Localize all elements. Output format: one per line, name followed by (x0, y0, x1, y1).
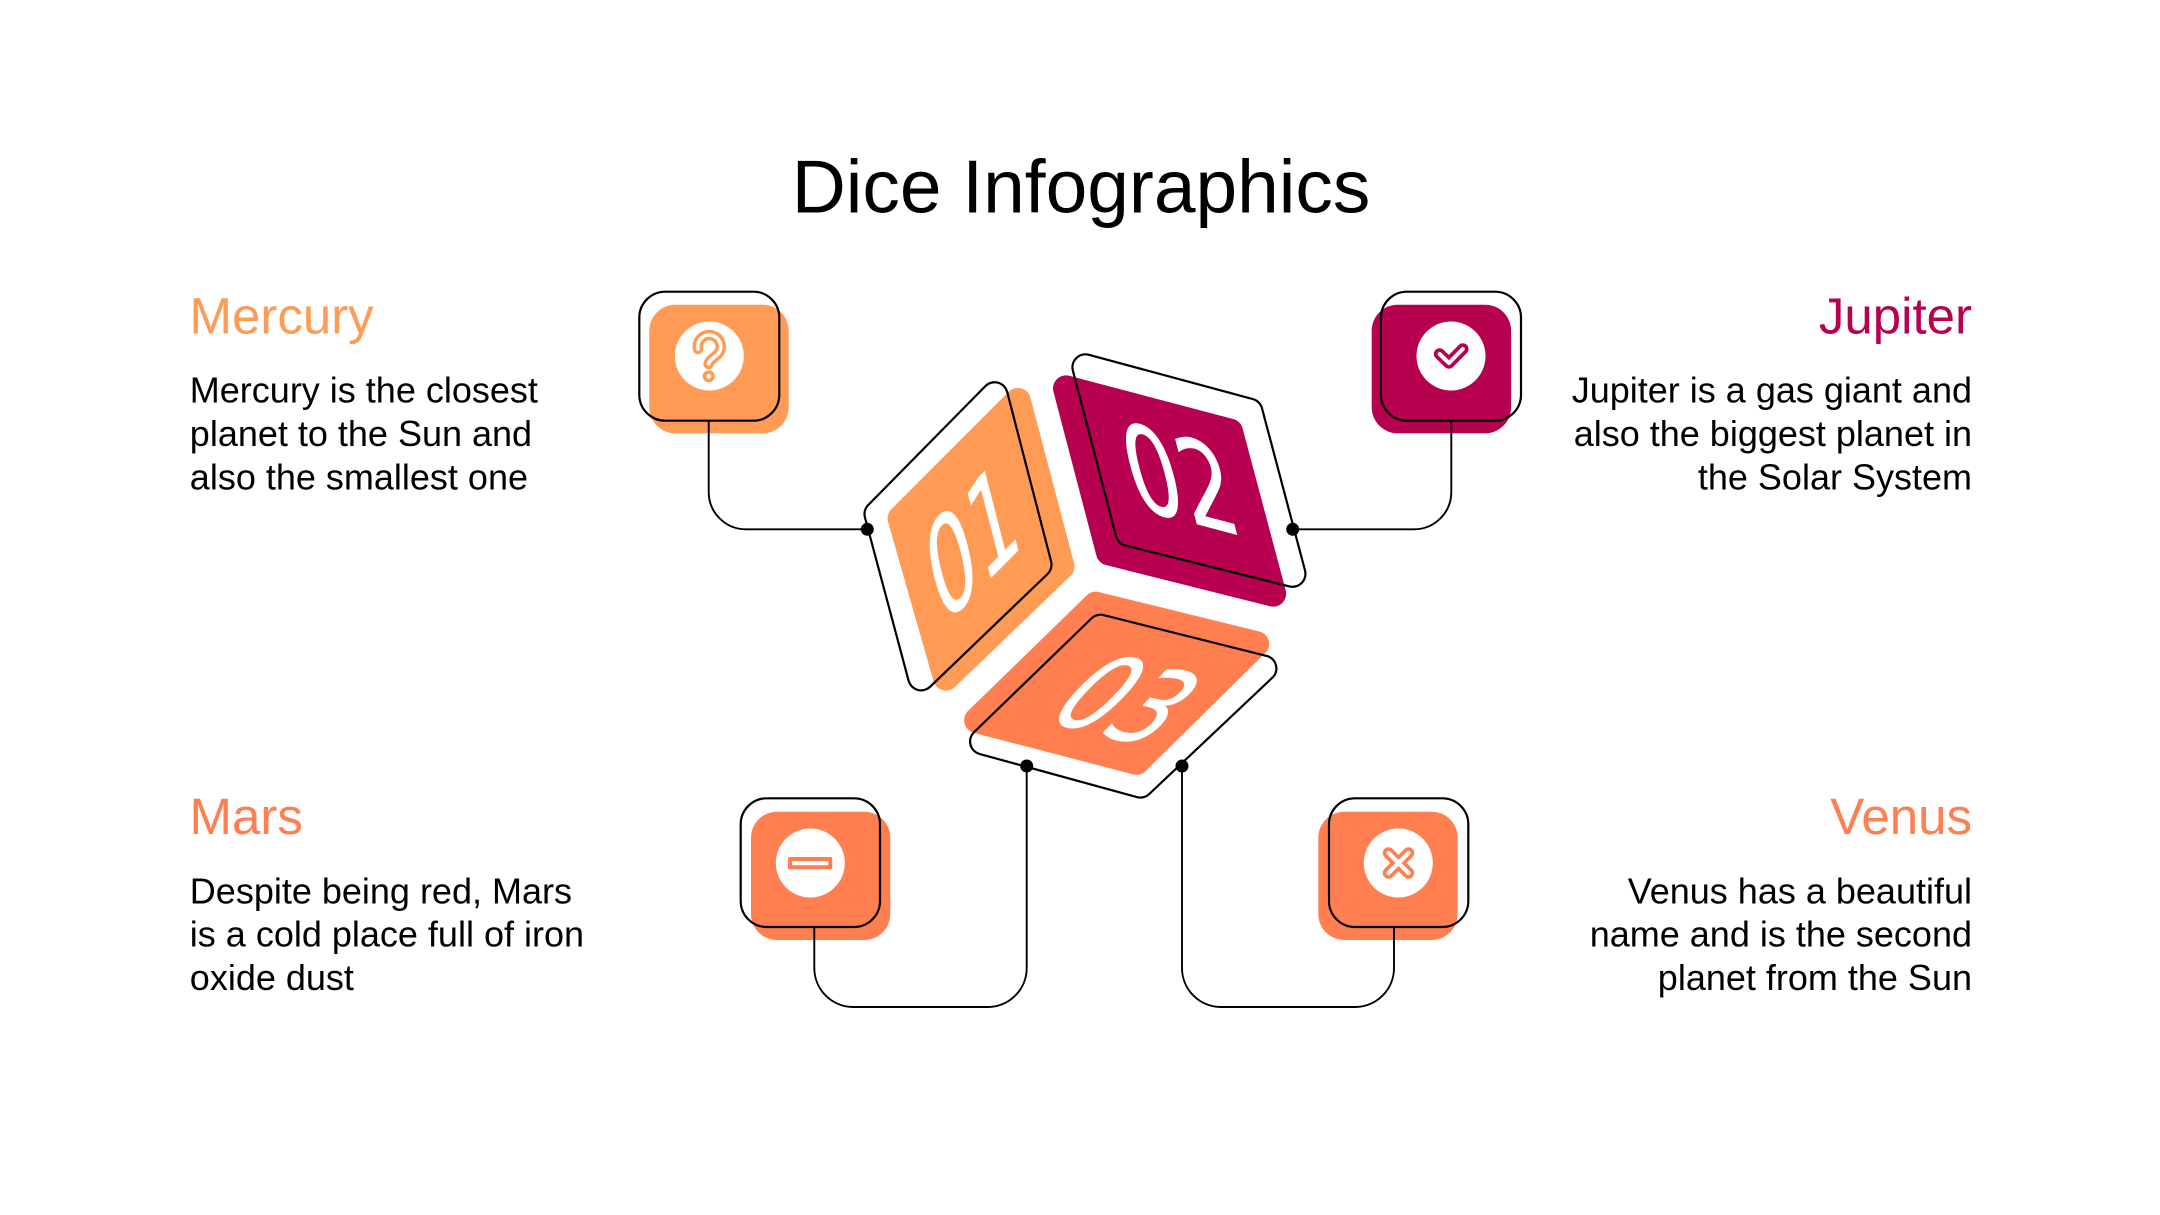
text block: Venus description: planet from the Sun (1658, 957, 1972, 998)
text block: Mars description: is a cold place full of iron (190, 914, 584, 955)
title: Dice Infographics (792, 145, 1370, 229)
text block: Mars description: oxide dust (190, 957, 354, 998)
text block: Jupiter description: Jupiter is a gas giant and (1572, 369, 1972, 410)
dice face 01 (864, 382, 1074, 691)
panel: Jupiter text (1572, 288, 1972, 497)
connector: Jupiter (1286, 421, 1451, 536)
icon card: Jupiter check mark (1372, 292, 1521, 433)
dice face 02 (1053, 354, 1305, 607)
dice face 03: 03 (1021, 634, 1231, 769)
text block: Mercury description: Mercury is the closest (190, 369, 538, 410)
panel: Mercury text (190, 288, 538, 497)
text block: Mars description: Despite being red, Mars (190, 870, 572, 911)
text block: Venus description: Venus has a beautiful (1628, 870, 1972, 911)
heading: Venus: Venus (1830, 788, 1972, 845)
connector: Mercury (709, 421, 874, 536)
icon card: Mars minus (741, 798, 890, 940)
heading: Mercury: Mercury (190, 288, 374, 345)
text block: Jupiter description: the Solar System (1698, 456, 1972, 497)
text block: Mercury description: also the smallest one (190, 456, 528, 497)
dice face 03 (964, 592, 1276, 798)
icon card: Venus cross (1318, 798, 1468, 940)
connector: Venus (1176, 760, 1394, 1007)
panel: Venus text (1590, 788, 1972, 998)
panel: Mars text (190, 788, 584, 998)
heading: Jupiter: Jupiter (1819, 288, 1972, 345)
icon card: Mercury question mark (639, 292, 789, 433)
connector: Mars (814, 760, 1033, 1007)
dice face 01: 01 (913, 431, 1031, 656)
text block: Mercury description: planet to the Sun and (190, 413, 532, 454)
text block: Jupiter description: also the biggest planet in (1574, 413, 1972, 454)
dice face 02: 02 (1107, 395, 1253, 566)
text block: Venus description: name and is the second (1590, 914, 1972, 955)
heading: Mars: Mars (190, 788, 303, 845)
